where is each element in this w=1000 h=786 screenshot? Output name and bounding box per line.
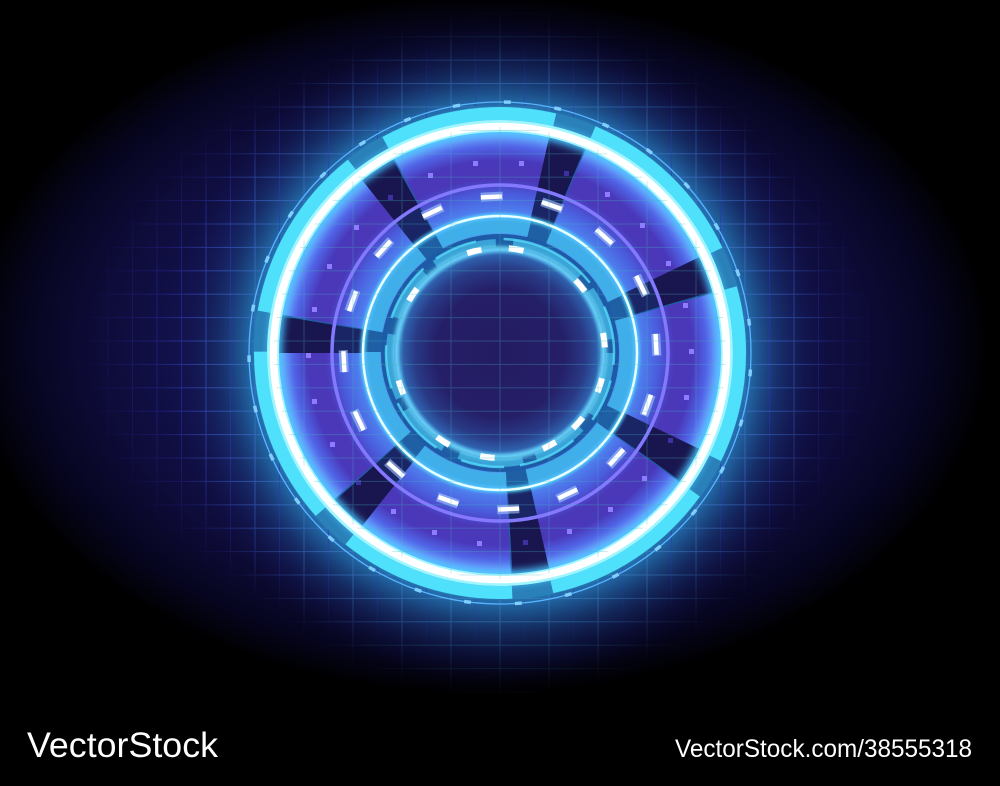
small square markers xyxy=(306,161,694,546)
inner second arcs xyxy=(344,197,656,509)
dark wedges middle xyxy=(347,200,653,506)
outer cyan band segments xyxy=(223,76,777,630)
watermark right: VectorStock.com/38555318 xyxy=(675,735,972,763)
middle white ring xyxy=(363,216,637,490)
inner cyan band segments xyxy=(353,206,647,500)
background grid xyxy=(93,20,867,686)
outer band base xyxy=(262,115,738,591)
dark wedges outer xyxy=(302,156,698,550)
outer ring ticks xyxy=(207,60,793,646)
inner disc xyxy=(396,249,604,457)
dark band inner xyxy=(384,237,616,469)
main white ring xyxy=(274,126,726,580)
HUD ring xyxy=(207,60,793,646)
purple ring xyxy=(332,185,668,521)
white dashes xyxy=(339,192,661,514)
watermark left: VectorStock xyxy=(27,726,219,765)
outer thin ring xyxy=(249,102,751,604)
main ring cyan edge xyxy=(273,126,727,580)
middle cyan ring xyxy=(363,216,637,490)
purple wheel segments xyxy=(301,154,699,552)
main ring glow xyxy=(275,128,725,578)
inner white arc dashes xyxy=(386,239,614,467)
grid overlay on ring xyxy=(274,127,726,579)
inner glow ring xyxy=(396,249,604,457)
wheel base xyxy=(273,126,727,580)
inner translucent arcs xyxy=(370,223,630,483)
